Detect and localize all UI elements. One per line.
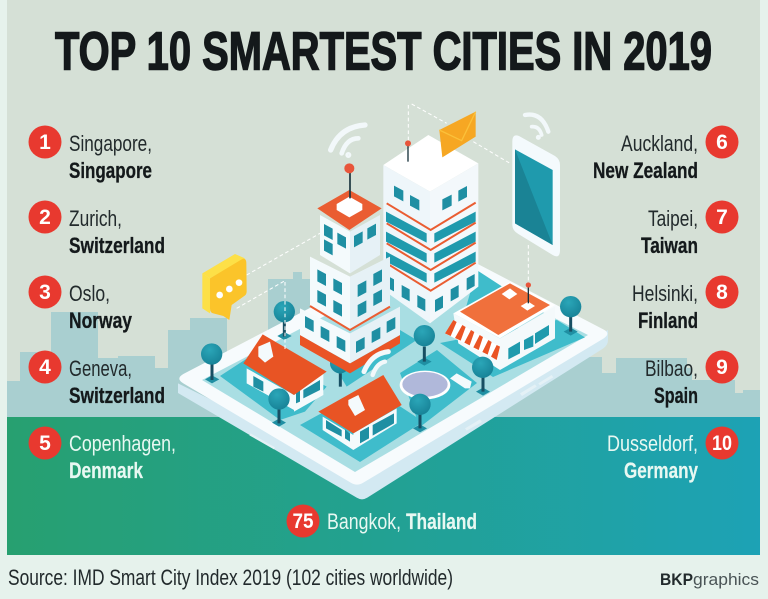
item 2 (28, 200, 165, 258)
trees (201, 296, 581, 432)
item 10: Dusseldorf, (607, 431, 698, 456)
shop (445, 282, 555, 370)
item 6: New Zealand (593, 158, 698, 183)
house 2 (318, 375, 402, 450)
background panel (7, 0, 760, 417)
skyline (7, 272, 760, 417)
wifi icons (331, 115, 548, 375)
item 5 (28, 426, 176, 483)
house 1 (243, 334, 327, 412)
dashed line to chat bubble (237, 281, 285, 350)
item 5: Denmark (69, 458, 144, 483)
item 9: Bilbao, (645, 356, 698, 381)
item 2: Switzerland (69, 233, 165, 258)
item 10: Germany (624, 458, 699, 483)
item 3: Oslo, (69, 281, 110, 306)
credit: graphics (693, 570, 759, 589)
envelope (439, 112, 476, 157)
item 3: 3 (39, 281, 51, 304)
item 6 (593, 126, 738, 183)
chat bubble (202, 254, 247, 320)
item 4 (28, 350, 165, 408)
item 3: Norway (69, 308, 133, 333)
item 7: Taiwan (641, 233, 698, 258)
tree behind tower (330, 353, 350, 387)
credit (660, 570, 759, 589)
smartphone (512, 135, 560, 256)
item 1: 1 (39, 131, 51, 154)
Bangkok rank: 75 (292, 510, 314, 533)
item 3 (28, 276, 133, 333)
item 5: 5 (39, 432, 51, 455)
list: right column (593, 126, 738, 483)
item 8: Finland (638, 308, 698, 333)
item 9: 9 (716, 356, 728, 379)
item 7 (641, 200, 738, 258)
source: Source: IMD Smart City Index 2019 (102 cities worldwide) (8, 565, 453, 590)
item 2: Zurich, (69, 206, 122, 231)
pool (400, 371, 472, 399)
Bangkok rank: Thailand (406, 509, 477, 534)
credit: BKP (660, 570, 693, 589)
item 10 (607, 426, 738, 483)
left tower (300, 163, 400, 373)
item 7: Taipei, (648, 206, 698, 231)
item 9: Spain (654, 383, 698, 408)
item 6: Auckland, (621, 131, 698, 156)
item 10: 10 (712, 432, 732, 455)
item 4: Geneva, (69, 356, 132, 381)
list: left column (28, 126, 176, 483)
item 2: 2 (39, 206, 51, 229)
Bangkok rank: Bangkok, (327, 509, 401, 534)
item 8: Helsinki, (632, 281, 698, 306)
item 8: 8 (716, 281, 728, 304)
right tower (383, 135, 478, 323)
item 9 (645, 350, 738, 408)
tablet (178, 244, 608, 499)
item 6: 6 (716, 131, 728, 154)
item 1: Singapore, (69, 131, 152, 156)
item 1: Singapore (69, 158, 152, 183)
ground band (7, 417, 760, 555)
Bangkok rank (286, 504, 477, 538)
dashed connector lines (247, 104, 528, 283)
item 4: Switzerland (69, 383, 165, 408)
item 5: Copenhagen, (69, 431, 176, 456)
item 4: 4 (39, 356, 51, 379)
item 1 (28, 126, 152, 183)
item 7: 7 (716, 206, 728, 229)
item 8 (632, 276, 738, 333)
illustration: smart city on tablet (178, 104, 608, 499)
